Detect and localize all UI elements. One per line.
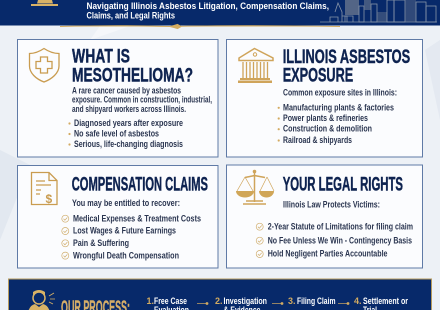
bullet list: Serious, life-changing diagnosis [74,139,183,149]
intro line: Common exposure sites in Illinois: [283,88,397,98]
step 1 [146,296,189,310]
header banner [0,0,440,26]
step 2 [215,296,267,310]
step 4: 4. [354,296,362,306]
intro line: You may be entitled to recover: [72,198,180,208]
heading [72,45,193,87]
step 4: Settlement or [363,296,408,306]
bullet list [68,118,183,149]
panel: your legal rights [226,165,422,268]
step 3: Filing Claim [297,296,336,306]
step 4 [354,296,408,310]
description: A rare cancer caused by asbestos [72,86,181,96]
checklist: Wrongful Death Compensation [73,250,179,260]
panel: what is mesothelioma [18,40,218,157]
bullet list: Manufacturing plants & factories [283,102,394,112]
header subtitle [86,1,329,20]
panel: our process [8,279,432,310]
checklist: Lost Wages & Future Earnings [73,226,176,236]
heading: WHAT IS [72,45,130,67]
step 1: 1. [146,296,154,306]
step 2: 2. [215,296,223,306]
checklist: Hold Negligent Parties Accountable [268,249,388,259]
bullet list: Construction & demolition [283,124,372,134]
checklist [256,221,413,259]
icon: person with headset [28,290,55,310]
heading: COMPENSATION CLAIMS [72,174,208,196]
heading: EXPOSURE [283,65,353,87]
bullet list: Diagnosed years after exposure [74,118,183,128]
description: and shipyard workers across Illinois. [72,104,186,114]
description: exposure. Common in construction, industrial, [72,95,212,105]
bullet list: Power plants & refineries [283,113,368,123]
checklist [62,213,201,260]
icon: claim document: $ [46,192,52,206]
description [72,86,212,114]
icon: gold trophy base [31,0,58,6]
icon: scales of justice [236,170,274,204]
bullet list: No safe level of asbestos [74,129,159,139]
bullet list [278,102,394,145]
step 3: 3. [288,296,296,306]
header subtitle: Navigating Illinois Asbestos Litigation, Compensation Claims, [86,1,329,11]
panel: compensation claims [18,166,218,268]
heading [283,46,410,87]
skyline illustration [320,0,437,22]
heading: MESOTHELIOMA? [72,65,193,87]
gold divider [60,24,340,28]
step 2: Investigation [224,296,267,306]
icon: claim document [32,172,57,206]
header subtitle: Claims, and Legal Rights [86,10,175,20]
arrow [197,302,208,305]
step 1: Free Case [154,296,187,306]
icon: courthouse [238,48,273,83]
checklist: Medical Expenses & Treatment Costs [73,213,201,223]
arrow [338,302,349,305]
intro line: Illinois Law Protects Victims: [283,200,380,210]
panel: illinois asbestos exposure [226,40,422,157]
bullet list: Railroad & shipyards [283,135,352,145]
checklist: Pain & Suffering [73,238,129,248]
step 3 [288,296,336,306]
arrow [272,302,283,305]
icon: medical shield [30,48,59,82]
